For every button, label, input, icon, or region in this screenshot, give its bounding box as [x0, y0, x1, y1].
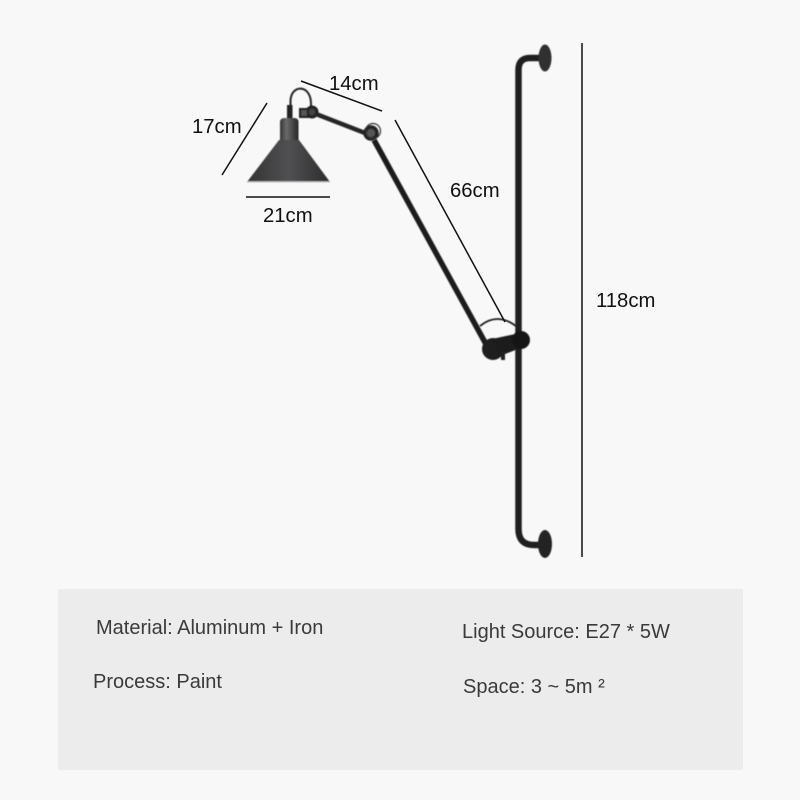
- dimension line 118cm: [581, 43, 583, 557]
- dimension line 14cm: [301, 81, 382, 111]
- label: 66cm: 66cm: [450, 180, 500, 202]
- spec: light source: Light Source: E27 * 5W: [462, 621, 670, 643]
- label: 17cm: 17cm: [192, 116, 242, 138]
- dimension line 66cm: [395, 120, 505, 322]
- panel: specifications: [58, 589, 743, 770]
- label: 118cm: 118cm: [596, 290, 655, 312]
- spec: material: Material: Aluminum + Iron: [96, 617, 323, 639]
- dimension line 21cm: [246, 196, 330, 198]
- spec: process: Process: Paint: [93, 671, 222, 693]
- wall rail: [518, 44, 552, 558]
- label: 21cm: 21cm: [263, 205, 313, 227]
- spec: space: Space: 3 ~ 5m ²: [463, 676, 605, 698]
- label: 14cm: 14cm: [329, 73, 379, 95]
- lamp arm lower: [374, 140, 530, 360]
- lamp arm upper: [290, 89, 380, 139]
- dimension line 17cm: [222, 103, 267, 175]
- lamp shade: [247, 105, 330, 182]
